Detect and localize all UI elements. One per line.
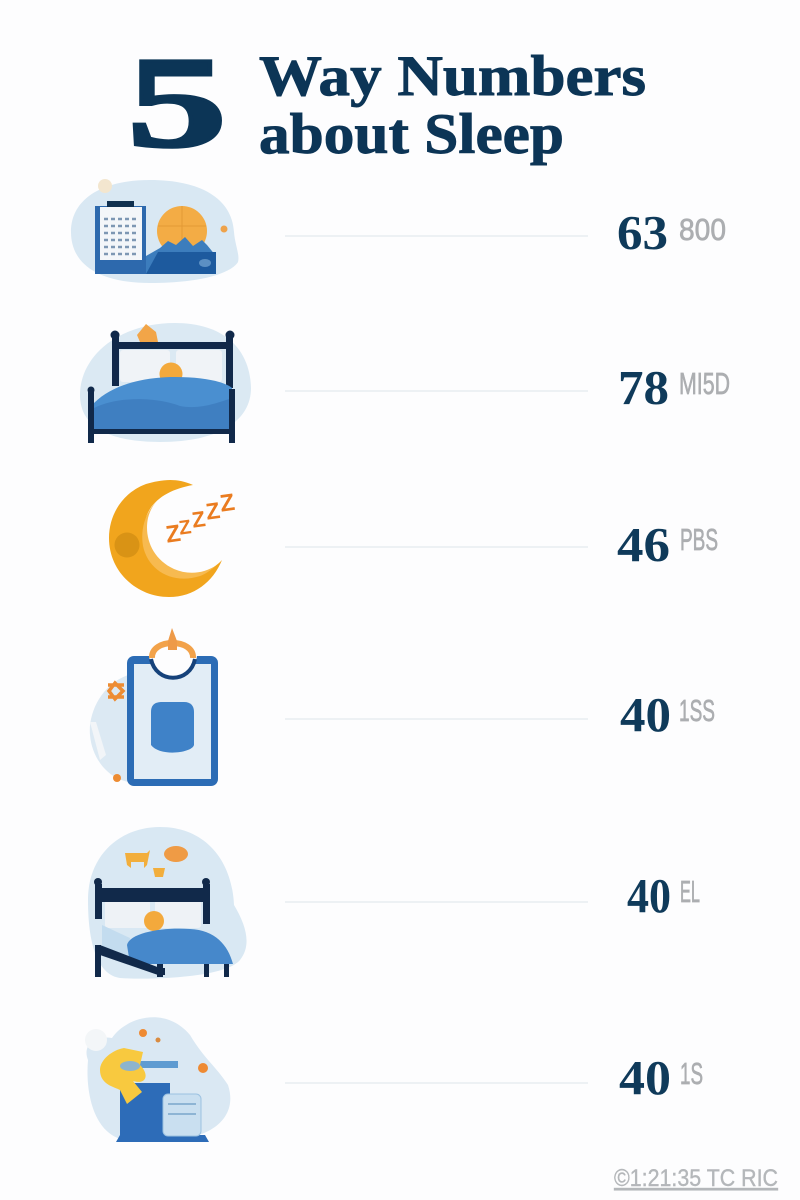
divider line xyxy=(285,390,588,392)
value: 40 xyxy=(627,868,671,923)
divider line xyxy=(285,546,588,548)
value: 40 xyxy=(620,687,671,742)
Z letters xyxy=(164,489,237,549)
Z letters: Z xyxy=(190,506,207,533)
Z letters: Z xyxy=(164,520,182,549)
unit label: EL xyxy=(680,874,700,909)
unit label: 1SS xyxy=(679,693,715,728)
unit label: 1S xyxy=(680,1056,703,1091)
value: 40 xyxy=(619,1050,671,1105)
icon: calendar and sunrise xyxy=(71,179,238,283)
icon: tablet with ring xyxy=(90,628,218,786)
icon: angled bed with sheep xyxy=(88,827,247,979)
title line 1: Way Numbers xyxy=(259,45,646,108)
value: 78 xyxy=(618,360,669,415)
Z letters: Z xyxy=(178,516,193,540)
row 2 xyxy=(80,323,730,443)
title line 2: about Sleep xyxy=(259,103,564,166)
unit label: 800 xyxy=(679,212,726,247)
Z letters: Z xyxy=(204,497,222,525)
row 5 xyxy=(88,827,700,979)
Z letters: Z xyxy=(218,489,237,518)
value: 46 xyxy=(617,517,670,572)
row 1 xyxy=(71,179,726,283)
divider line xyxy=(285,1082,588,1084)
icon: nightstand with moon xyxy=(85,1017,230,1142)
row 6 xyxy=(85,1017,703,1142)
unit label: MI5D xyxy=(679,366,730,401)
icon: bed with sun xyxy=(80,323,251,443)
unit label: PBS xyxy=(680,522,718,557)
title numeral 5: 5 xyxy=(127,31,227,175)
icon: crescent moon with Zs xyxy=(109,480,237,597)
footer watermark: ©1:21:35 TC RIC xyxy=(614,1165,778,1192)
value: 63 xyxy=(617,205,668,260)
divider line xyxy=(285,901,588,903)
divider line xyxy=(285,235,588,237)
row 4 xyxy=(90,628,715,786)
title xyxy=(127,31,646,175)
divider line xyxy=(285,718,588,720)
row 3 xyxy=(109,480,718,597)
